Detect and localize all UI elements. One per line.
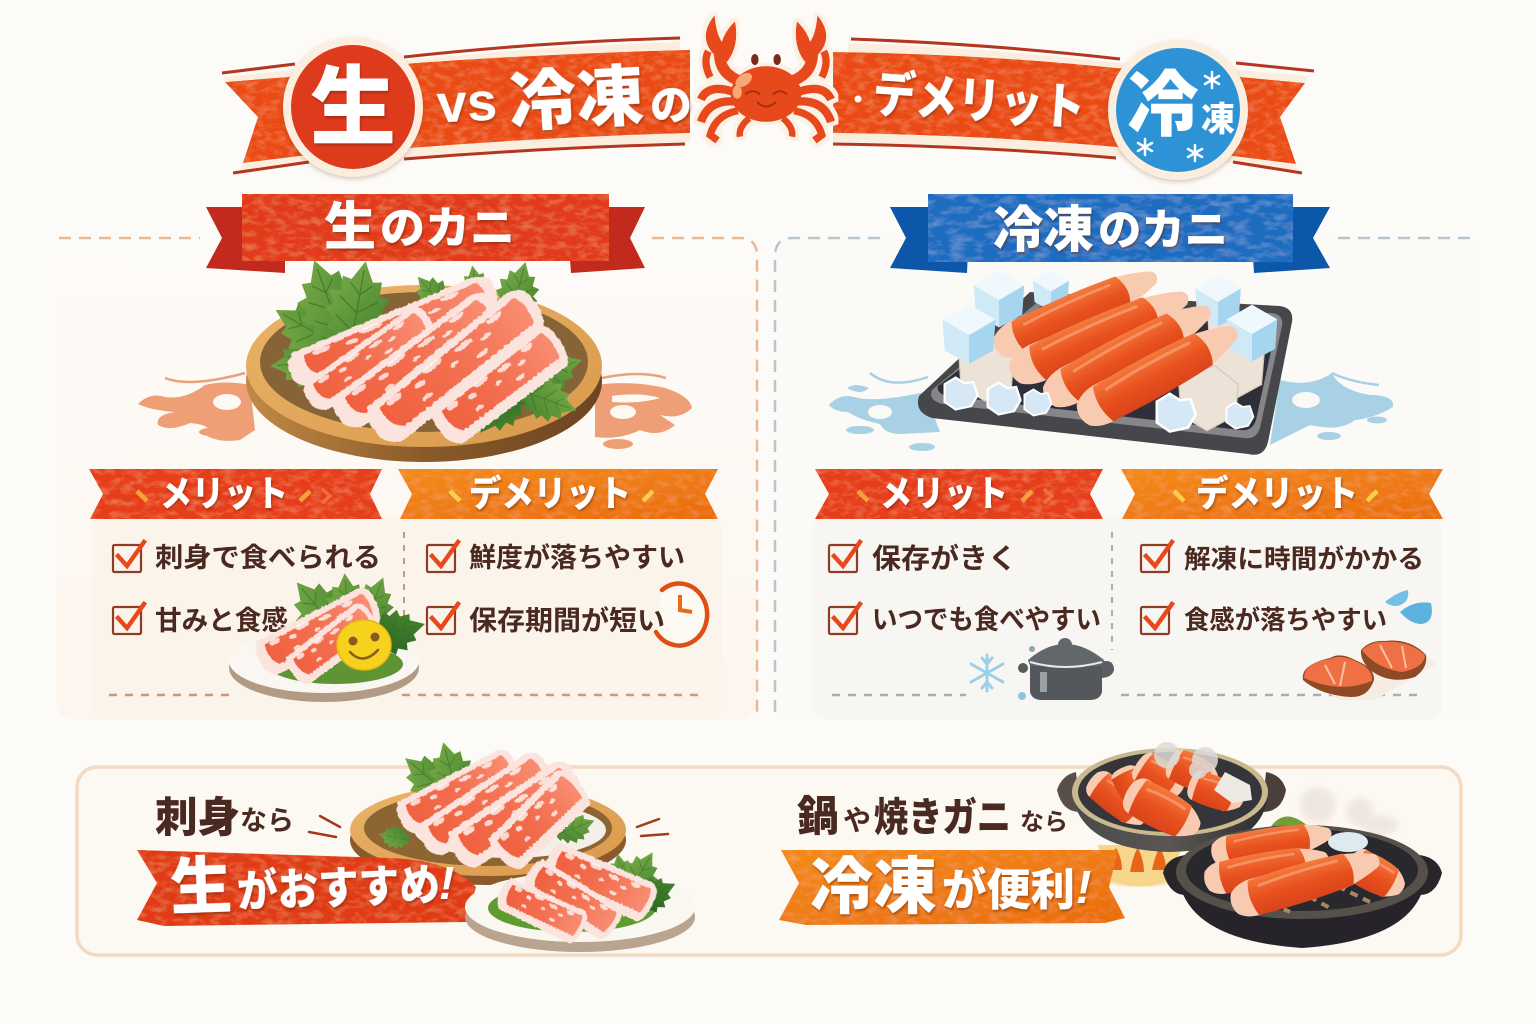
badge: raw bbox=[283, 37, 423, 177]
icon: crab mascot bbox=[701, 18, 831, 141]
text: for sashimi: 刺身 bbox=[155, 794, 240, 841]
ribbon: raw recommended bbox=[137, 850, 476, 926]
ribbon: frozen convenient: が便利 bbox=[942, 865, 1075, 915]
icon: water drops bbox=[1385, 590, 1432, 624]
icon: cooking pot bbox=[1018, 638, 1114, 700]
splash: peach watercolor bbox=[138, 373, 692, 449]
panel: recommendation bbox=[77, 736, 1461, 955]
ribbon: raw recommended: がおすすめ bbox=[236, 860, 441, 917]
merit item: eat as sashimi: 刺身で食べられる bbox=[155, 543, 381, 573]
ribbon: merit: メリット bbox=[880, 473, 1008, 514]
banner left band bbox=[222, 38, 690, 173]
ribbon: frozen convenient: ! bbox=[1076, 861, 1091, 913]
ribbon: demerit bbox=[1121, 469, 1443, 519]
ribbon: frozen crab heading: のカニ bbox=[1098, 207, 1228, 255]
ribbon: raw crab heading: 生 bbox=[324, 199, 376, 257]
text: for hot pot and grilled crab: なら bbox=[1020, 809, 1068, 836]
burst lines bbox=[309, 816, 668, 837]
heading: vs frozen: の bbox=[649, 81, 693, 130]
text: for hot pot and grilled crab bbox=[797, 793, 1068, 840]
ribbon: demerit: デメリット bbox=[469, 473, 631, 514]
card: raw pros and cons bbox=[89, 469, 722, 720]
badge: frozen bbox=[1108, 40, 1248, 180]
illustration: small plate with smiley bbox=[229, 565, 431, 702]
text: for sashimi: なら bbox=[240, 806, 294, 836]
illustration: white plate of raw crab bbox=[465, 838, 695, 952]
ribbon: frozen crab heading bbox=[890, 194, 1330, 273]
illustration: wooden bowl of raw crab bbox=[350, 736, 626, 885]
text: for hot pot and grilled crab: や bbox=[843, 805, 871, 836]
merit item: sweetness and texture: 甘みと食感 bbox=[155, 606, 288, 636]
icon: snowflake bbox=[971, 655, 1003, 691]
demerit item: texture degrades: 食感が落ちやすい bbox=[1184, 605, 1387, 635]
heading: vs frozen: 冷凍 bbox=[507, 59, 646, 140]
text: for sashimi bbox=[155, 794, 294, 841]
ribbon: raw crab heading: のカニ bbox=[380, 204, 515, 253]
illustration: tray of frozen crab bbox=[918, 259, 1292, 455]
ribbon: merit bbox=[89, 469, 382, 519]
illustration: cut crab shells bbox=[1303, 641, 1436, 700]
ribbon: merit bbox=[815, 469, 1103, 519]
panel: raw crab bbox=[56, 194, 757, 720]
illustration: grill plate with crab bbox=[1163, 787, 1442, 948]
badge: frozen: 凍 bbox=[1201, 101, 1235, 139]
text: for hot pot and grilled crab: 焼きガニ bbox=[874, 796, 1011, 840]
ribbon: raw recommended: ! bbox=[439, 857, 454, 909]
demerit item: short shelf life: 保存期間が短い bbox=[469, 605, 665, 636]
merit item: easy anytime: いつでも食べやすい bbox=[872, 605, 1101, 635]
heading: demerits: デメリット bbox=[871, 66, 1087, 137]
heading: vs frozen: vs bbox=[435, 71, 498, 135]
ribbon: frozen crab heading: 冷凍 bbox=[993, 202, 1094, 258]
badge: raw: 生 bbox=[310, 60, 396, 156]
ribbon: demerit bbox=[398, 469, 718, 519]
ribbon: raw crab heading bbox=[206, 194, 645, 273]
icon: clock bbox=[656, 584, 707, 646]
merit item: keeps well: 保存がきく bbox=[872, 542, 1017, 574]
card: frozen pros and cons bbox=[812, 469, 1443, 720]
badge: frozen: 冷 bbox=[1127, 66, 1199, 146]
ribbon: merit: メリット bbox=[160, 473, 288, 514]
ribbon: demerit: デメリット bbox=[1196, 473, 1358, 514]
demerit item: loses freshness: 鮮度が落ちやすい bbox=[469, 542, 685, 573]
ribbon: frozen convenient: 冷凍 bbox=[810, 853, 937, 922]
splash: blue watercolor bbox=[829, 373, 1393, 451]
banner right band bbox=[833, 39, 1314, 173]
ribbon: raw recommended: 生 bbox=[169, 852, 233, 923]
demerit item: thawing takes time: 解凍に時間がかかる bbox=[1184, 544, 1424, 574]
illustration: wooden plate of raw crab bbox=[246, 249, 602, 462]
heading: vs frozen bbox=[435, 59, 693, 140]
panel: frozen crab bbox=[775, 194, 1476, 720]
text: for hot pot and grilled crab: 鍋 bbox=[797, 793, 839, 840]
title banner bbox=[222, 18, 1314, 180]
ribbon: frozen convenient bbox=[779, 850, 1125, 925]
illustration: hot pot over fire bbox=[1057, 742, 1286, 887]
